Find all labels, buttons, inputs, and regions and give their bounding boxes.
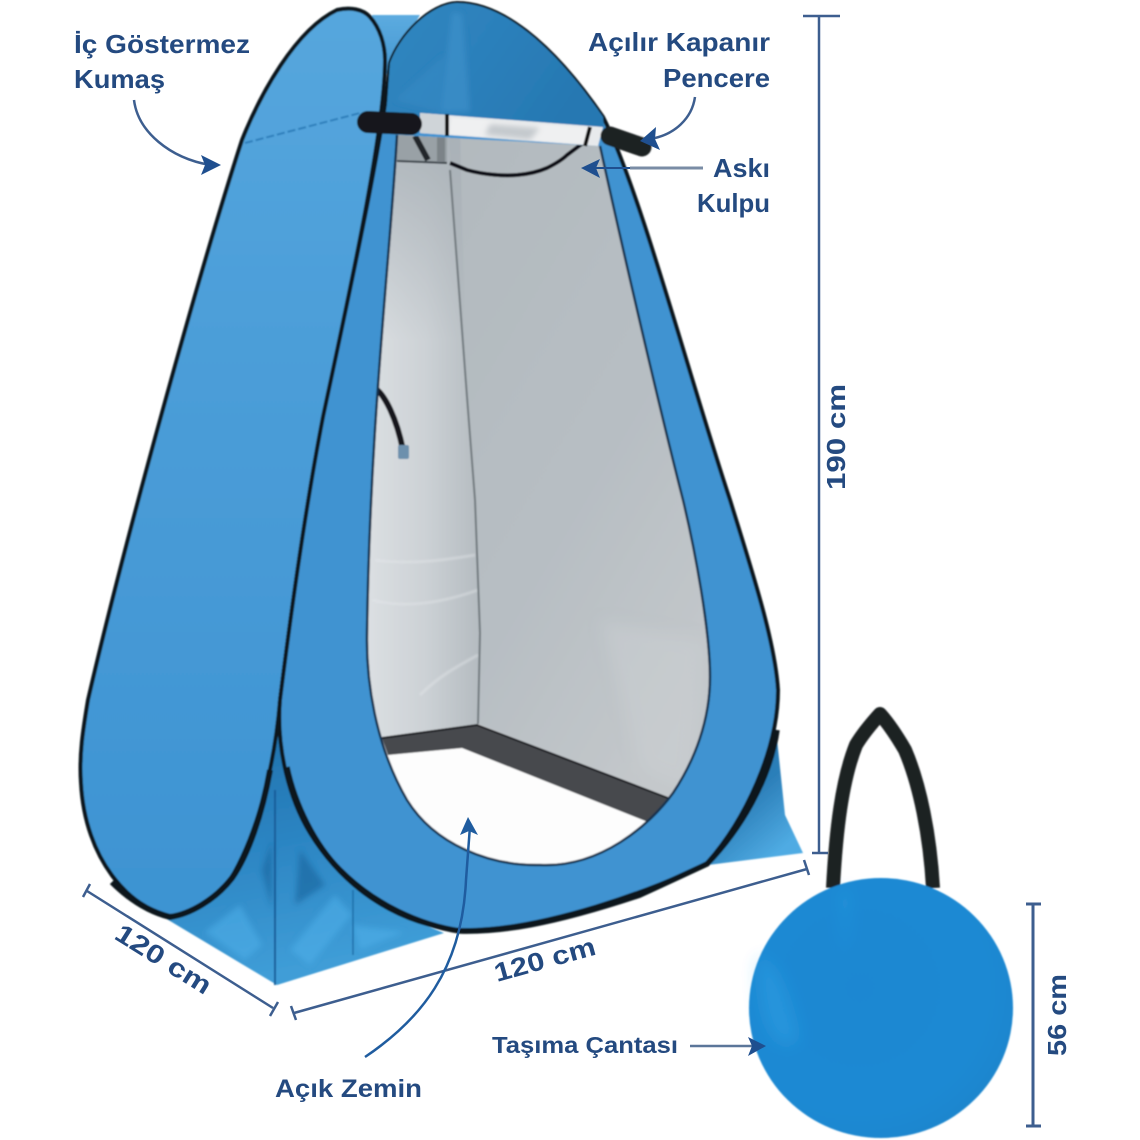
bag [749, 714, 1013, 1138]
arrow: fabric [134, 100, 221, 175]
label: İç Göstermez Kumaş [74, 29, 250, 94]
bag handle [833, 714, 933, 888]
interior right wall [447, 130, 725, 800]
front panel hood [386, 3, 604, 128]
label: Açılır Kapanır Pencere: Pencere [663, 63, 770, 93]
label: Askı Kulpu: Kulpu [697, 188, 770, 218]
tent [80, 3, 803, 985]
ground sheet left [160, 700, 444, 985]
bag height dimension 56 cm: 56 cm [1042, 974, 1072, 1056]
floor [382, 723, 647, 866]
pocket [397, 135, 447, 163]
label: Açık Zemin: Açık Zemin [275, 1075, 422, 1103]
wall seam [450, 170, 480, 724]
left panel seam [245, 113, 360, 143]
arrow: open floor [365, 817, 478, 1057]
floor band [382, 725, 668, 822]
arrow: hanger [581, 159, 703, 178]
right grip [610, 136, 642, 147]
door interior [360, 130, 725, 880]
front panel lower black edge [287, 730, 777, 931]
arrow: bag [690, 1037, 766, 1056]
width dimension 120 cm [291, 860, 809, 1020]
label: Askı Kulpu [697, 153, 770, 218]
height dimension 190 cm: 190 cm [821, 384, 851, 490]
label: Taşıma Çantası: Taşıma Çantası [492, 1032, 678, 1058]
arrow: window [640, 97, 695, 150]
hanging bar [368, 113, 642, 147]
bag height dimension 56 cm [1026, 904, 1072, 1126]
depth dimension 120 cm [83, 884, 278, 1016]
wall wrinkles [420, 554, 478, 694]
height dimension 190 cm [803, 16, 851, 853]
label: İç Göstermez Kumaş: Kumaş [74, 64, 165, 94]
hanging strap [450, 140, 587, 175]
side cord [373, 387, 403, 450]
ground sheet right [700, 720, 803, 866]
left panel lower black edge [112, 770, 270, 917]
label: Açılır Kapanır Pencere [588, 27, 770, 93]
tent back panel [372, 15, 420, 90]
label: Askı Kulpu: Askı [713, 153, 770, 183]
bag body [749, 878, 1013, 1138]
label: İç Göstermez Kumaş: İç Göstermez [74, 29, 250, 59]
interior left wall [360, 130, 480, 740]
front panel [279, 3, 778, 930]
door edge [367, 135, 710, 865]
left side panel [80, 9, 385, 916]
label: Açılır Kapanır Pencere: Açılır Kapanır [588, 27, 770, 57]
width dimension 120 cm: 120 cm [491, 931, 599, 988]
left grip [368, 122, 411, 124]
depth dimension 120 cm: 120 cm [110, 918, 217, 1000]
